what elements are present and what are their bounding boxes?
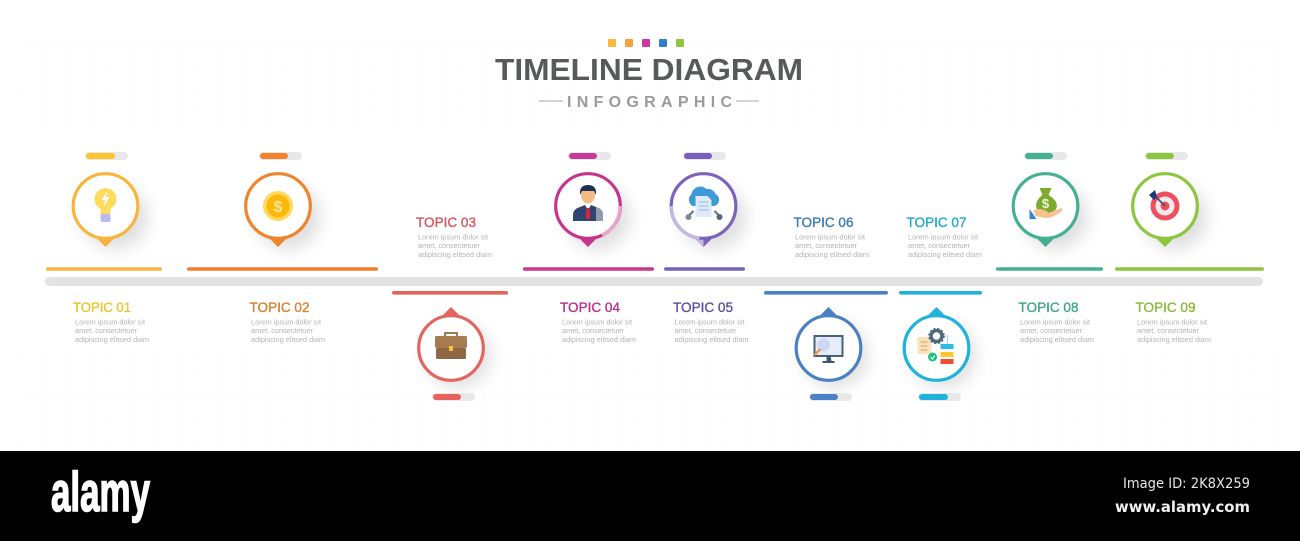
description (1020, 318, 1094, 344)
description: amet, consectetuer (562, 326, 625, 335)
description: adipiscing elitsed diam (562, 335, 636, 344)
progress bar (568, 152, 611, 160)
pin: bulb (73, 174, 148, 249)
heading: TOPIC 08 (1018, 300, 1078, 315)
description: amet, consectetuer (251, 326, 314, 335)
description: adipiscing elitsed diam (674, 335, 748, 344)
subheading: INFOGRAPHIC (567, 94, 732, 111)
heading: TOPIC 09 (1136, 300, 1196, 315)
progress bar (1145, 152, 1188, 160)
bar below line (392, 291, 508, 295)
logo: alamy: alamy (51, 460, 150, 523)
colour squares (608, 39, 684, 47)
bar above line (187, 267, 378, 271)
description: Lorem ipsum dolor sit (674, 318, 744, 326)
description: Lorem ipsum dolor sit (251, 318, 321, 326)
pin: cloud document (671, 174, 746, 249)
topic 05 (664, 152, 748, 344)
description: amet, consectetuer (795, 241, 858, 250)
heading: TOPIC 01 (73, 300, 131, 315)
topic 08 (996, 152, 1103, 344)
bar below line (764, 291, 888, 295)
icon: target (1149, 190, 1180, 220)
description: adipiscing elitsed diam (795, 250, 869, 259)
image id: Image ID: 2K8X259 (1123, 476, 1250, 492)
description (1137, 318, 1211, 344)
description (418, 232, 492, 259)
description (75, 318, 149, 344)
bar above line (664, 267, 745, 271)
pin: briefcase (419, 307, 490, 387)
description: amet, consectetuer (75, 326, 138, 335)
progress bar (683, 152, 726, 160)
progress bar (85, 152, 128, 160)
heading: TOPIC 03 (416, 215, 476, 230)
bar above line (1115, 267, 1264, 271)
progress bar (918, 393, 961, 401)
heading: TIMELINE DIAGRAM (495, 52, 803, 87)
heading: TOPIC 02 (250, 300, 310, 315)
heading: TOPIC 06 (794, 215, 854, 230)
progress bar (259, 152, 302, 160)
watermark footer band (0, 451, 1300, 541)
description: adipiscing elitsed diam (908, 250, 982, 259)
description: adipiscing elitsed diam (75, 335, 149, 344)
description: amet, consectetuer (1137, 326, 1200, 335)
description: adipiscing elitsed diam (251, 335, 325, 344)
progress bar (432, 393, 475, 401)
description: Lorem ipsum dolor sit (795, 232, 865, 242)
icon: workflow (918, 328, 954, 364)
topic 06 (764, 215, 888, 401)
icon: briefcase (435, 333, 467, 359)
icon: light bulb (94, 188, 116, 222)
topic 07 (899, 215, 982, 401)
description: adipiscing elitsed diam (1020, 335, 1094, 344)
icon: coin: $ (274, 199, 283, 216)
website: www.alamy.com (1115, 498, 1250, 516)
topic 09 (1115, 152, 1264, 344)
icon: cloud document (686, 187, 722, 220)
bar above line (996, 267, 1103, 271)
description (908, 232, 982, 259)
heading: TOPIC 07 (906, 215, 966, 230)
description: adipiscing elitsed diam (1137, 335, 1211, 344)
topic 04 (523, 152, 654, 344)
description: amet, consectetuer (674, 326, 737, 335)
title block (495, 39, 803, 111)
description: amet, consectetuer (1020, 326, 1083, 335)
pin: money bag (1013, 174, 1088, 249)
description: amet, consectetuer (908, 241, 971, 250)
description: Lorem ipsum dolor sit (562, 318, 632, 326)
topic 03 (392, 215, 508, 401)
pin: businessman (556, 174, 630, 249)
description (795, 232, 869, 259)
description: amet, consectetuer (418, 241, 481, 250)
description (251, 318, 325, 344)
icon: monitor (814, 336, 842, 363)
icon: money bag in hand: $ (1042, 196, 1050, 211)
progress bar (809, 393, 852, 401)
pin: monitor (796, 307, 868, 387)
pin: target (1133, 174, 1207, 249)
description (674, 318, 748, 344)
heading: TOPIC 04 (560, 300, 620, 315)
bar below line (899, 291, 982, 295)
bar above line (46, 267, 162, 271)
topic 02 (187, 152, 378, 344)
topic 01 (46, 152, 162, 344)
timeline main bar (45, 277, 1263, 286)
description: Lorem ipsum dolor sit (418, 232, 488, 242)
heading: TOPIC 05 (673, 300, 733, 315)
description: Lorem ipsum dolor sit (1020, 318, 1090, 326)
description: Lorem ipsum dolor sit (908, 232, 978, 242)
description: adipiscing elitsed diam (418, 250, 492, 259)
description: Lorem ipsum dolor sit (1137, 318, 1207, 326)
icon: businessman (573, 185, 603, 221)
description (562, 318, 636, 344)
description: Lorem ipsum dolor sit (75, 318, 145, 326)
progress bar (1024, 152, 1067, 160)
pin: workflow (904, 307, 976, 387)
pin: coin (246, 174, 320, 249)
bar above line (523, 267, 654, 271)
